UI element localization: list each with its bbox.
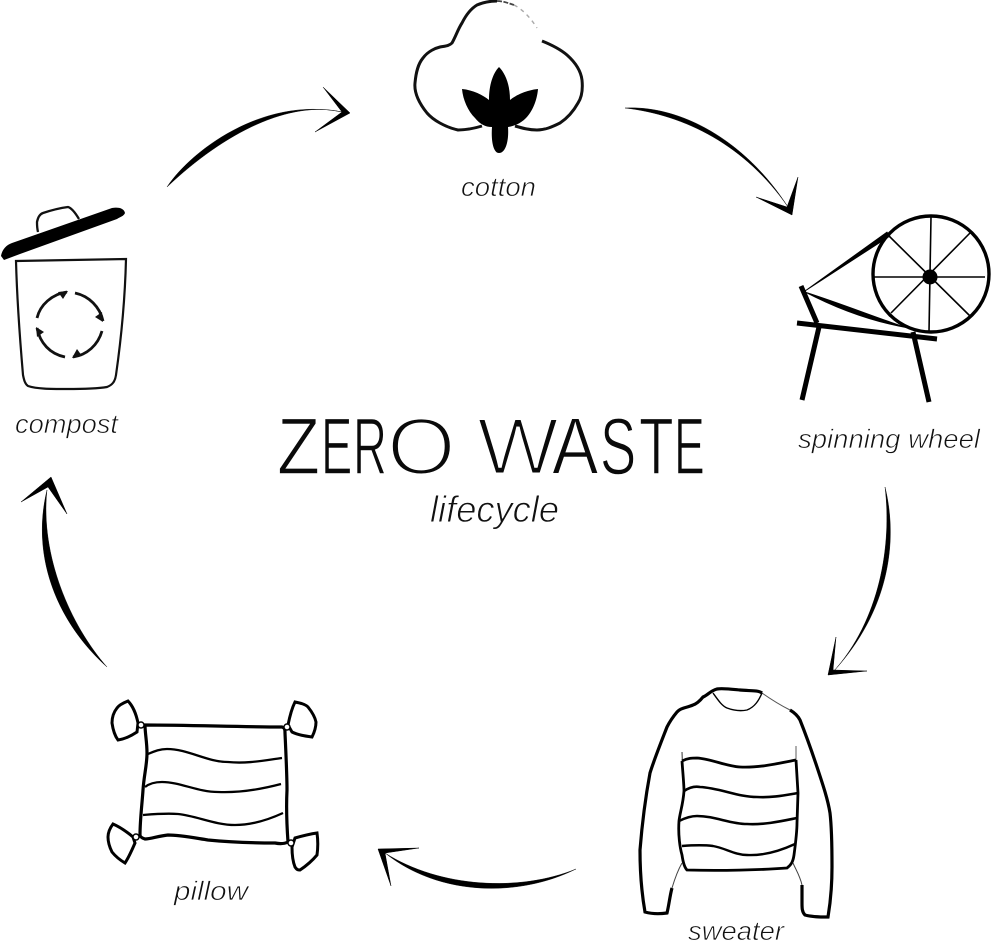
title: O <box>387 402 455 492</box>
recycling arrows <box>37 292 103 357</box>
subtitle: lifecycle: lifecycle <box>430 489 559 530</box>
arrow: spinning wheel to sweater <box>828 487 890 675</box>
bin lid <box>1 208 125 260</box>
title: S <box>600 402 636 492</box>
label: spinning wheel: spinning wheel <box>798 424 981 454</box>
lid handle <box>37 207 79 232</box>
icon: spinning wheel <box>797 216 989 402</box>
label: pillow: pillow <box>173 876 250 906</box>
title: A <box>552 402 598 492</box>
title: Z <box>277 402 320 492</box>
tassels <box>108 701 318 870</box>
title: R <box>353 402 387 492</box>
arrow: pillow to compost <box>21 477 107 667</box>
icon: cotton <box>415 1 582 153</box>
arrow: cotton to spinning wheel <box>625 108 798 215</box>
icon: pillow <box>108 701 318 870</box>
arrow: sweater to pillow <box>378 848 576 888</box>
title: W <box>476 402 558 492</box>
label: compost: compost <box>15 409 120 439</box>
arrow: compost to cotton <box>167 87 350 187</box>
title: E <box>674 402 705 492</box>
title <box>277 402 705 492</box>
label: sweater: sweater <box>688 916 785 946</box>
bin body <box>16 259 126 389</box>
icon: compost bin <box>1 207 126 389</box>
label: cotton: cotton <box>461 172 536 202</box>
title: T <box>639 402 674 492</box>
icon: sweater <box>640 689 832 917</box>
title: E <box>321 402 352 492</box>
